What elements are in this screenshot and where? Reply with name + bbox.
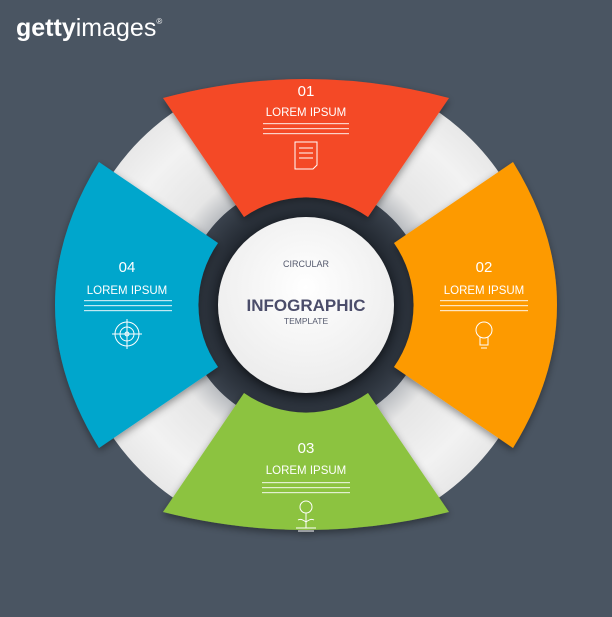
segment 04 blue: 04 (119, 259, 135, 276)
center circle (218, 217, 394, 393)
segment 02 orange (394, 162, 557, 448)
segment 03 green (163, 393, 449, 531)
segment 03 green: LOREM IPSUM (266, 465, 346, 477)
dark inner ring (184, 183, 428, 427)
segment 02 orange: LOREM IPSUM (444, 285, 524, 297)
segment 01 red: LOREM IPSUM (266, 107, 346, 119)
logo: gettyimages: ® (156, 17, 162, 26)
icon: bulb (476, 322, 492, 348)
center circle: TEMPLATE (284, 316, 328, 326)
white ring pieces (128, 127, 484, 483)
logo: gettyimages: gettyimages (16, 14, 156, 42)
segment 04 blue (55, 162, 218, 448)
segment 03 green: 03 (298, 440, 314, 457)
segment 04 blue: LOREM IPSUM (87, 285, 167, 297)
segment 02 orange: 02 (476, 259, 492, 276)
icon: money plant (296, 501, 316, 531)
icon: document (295, 142, 317, 169)
center circle: INFOGRAPHIC (246, 296, 366, 315)
segment 01 red (163, 79, 449, 217)
icon: target (112, 319, 142, 349)
center circle: CIRCULAR (283, 259, 329, 269)
segment 01 red: 01 (298, 83, 314, 100)
